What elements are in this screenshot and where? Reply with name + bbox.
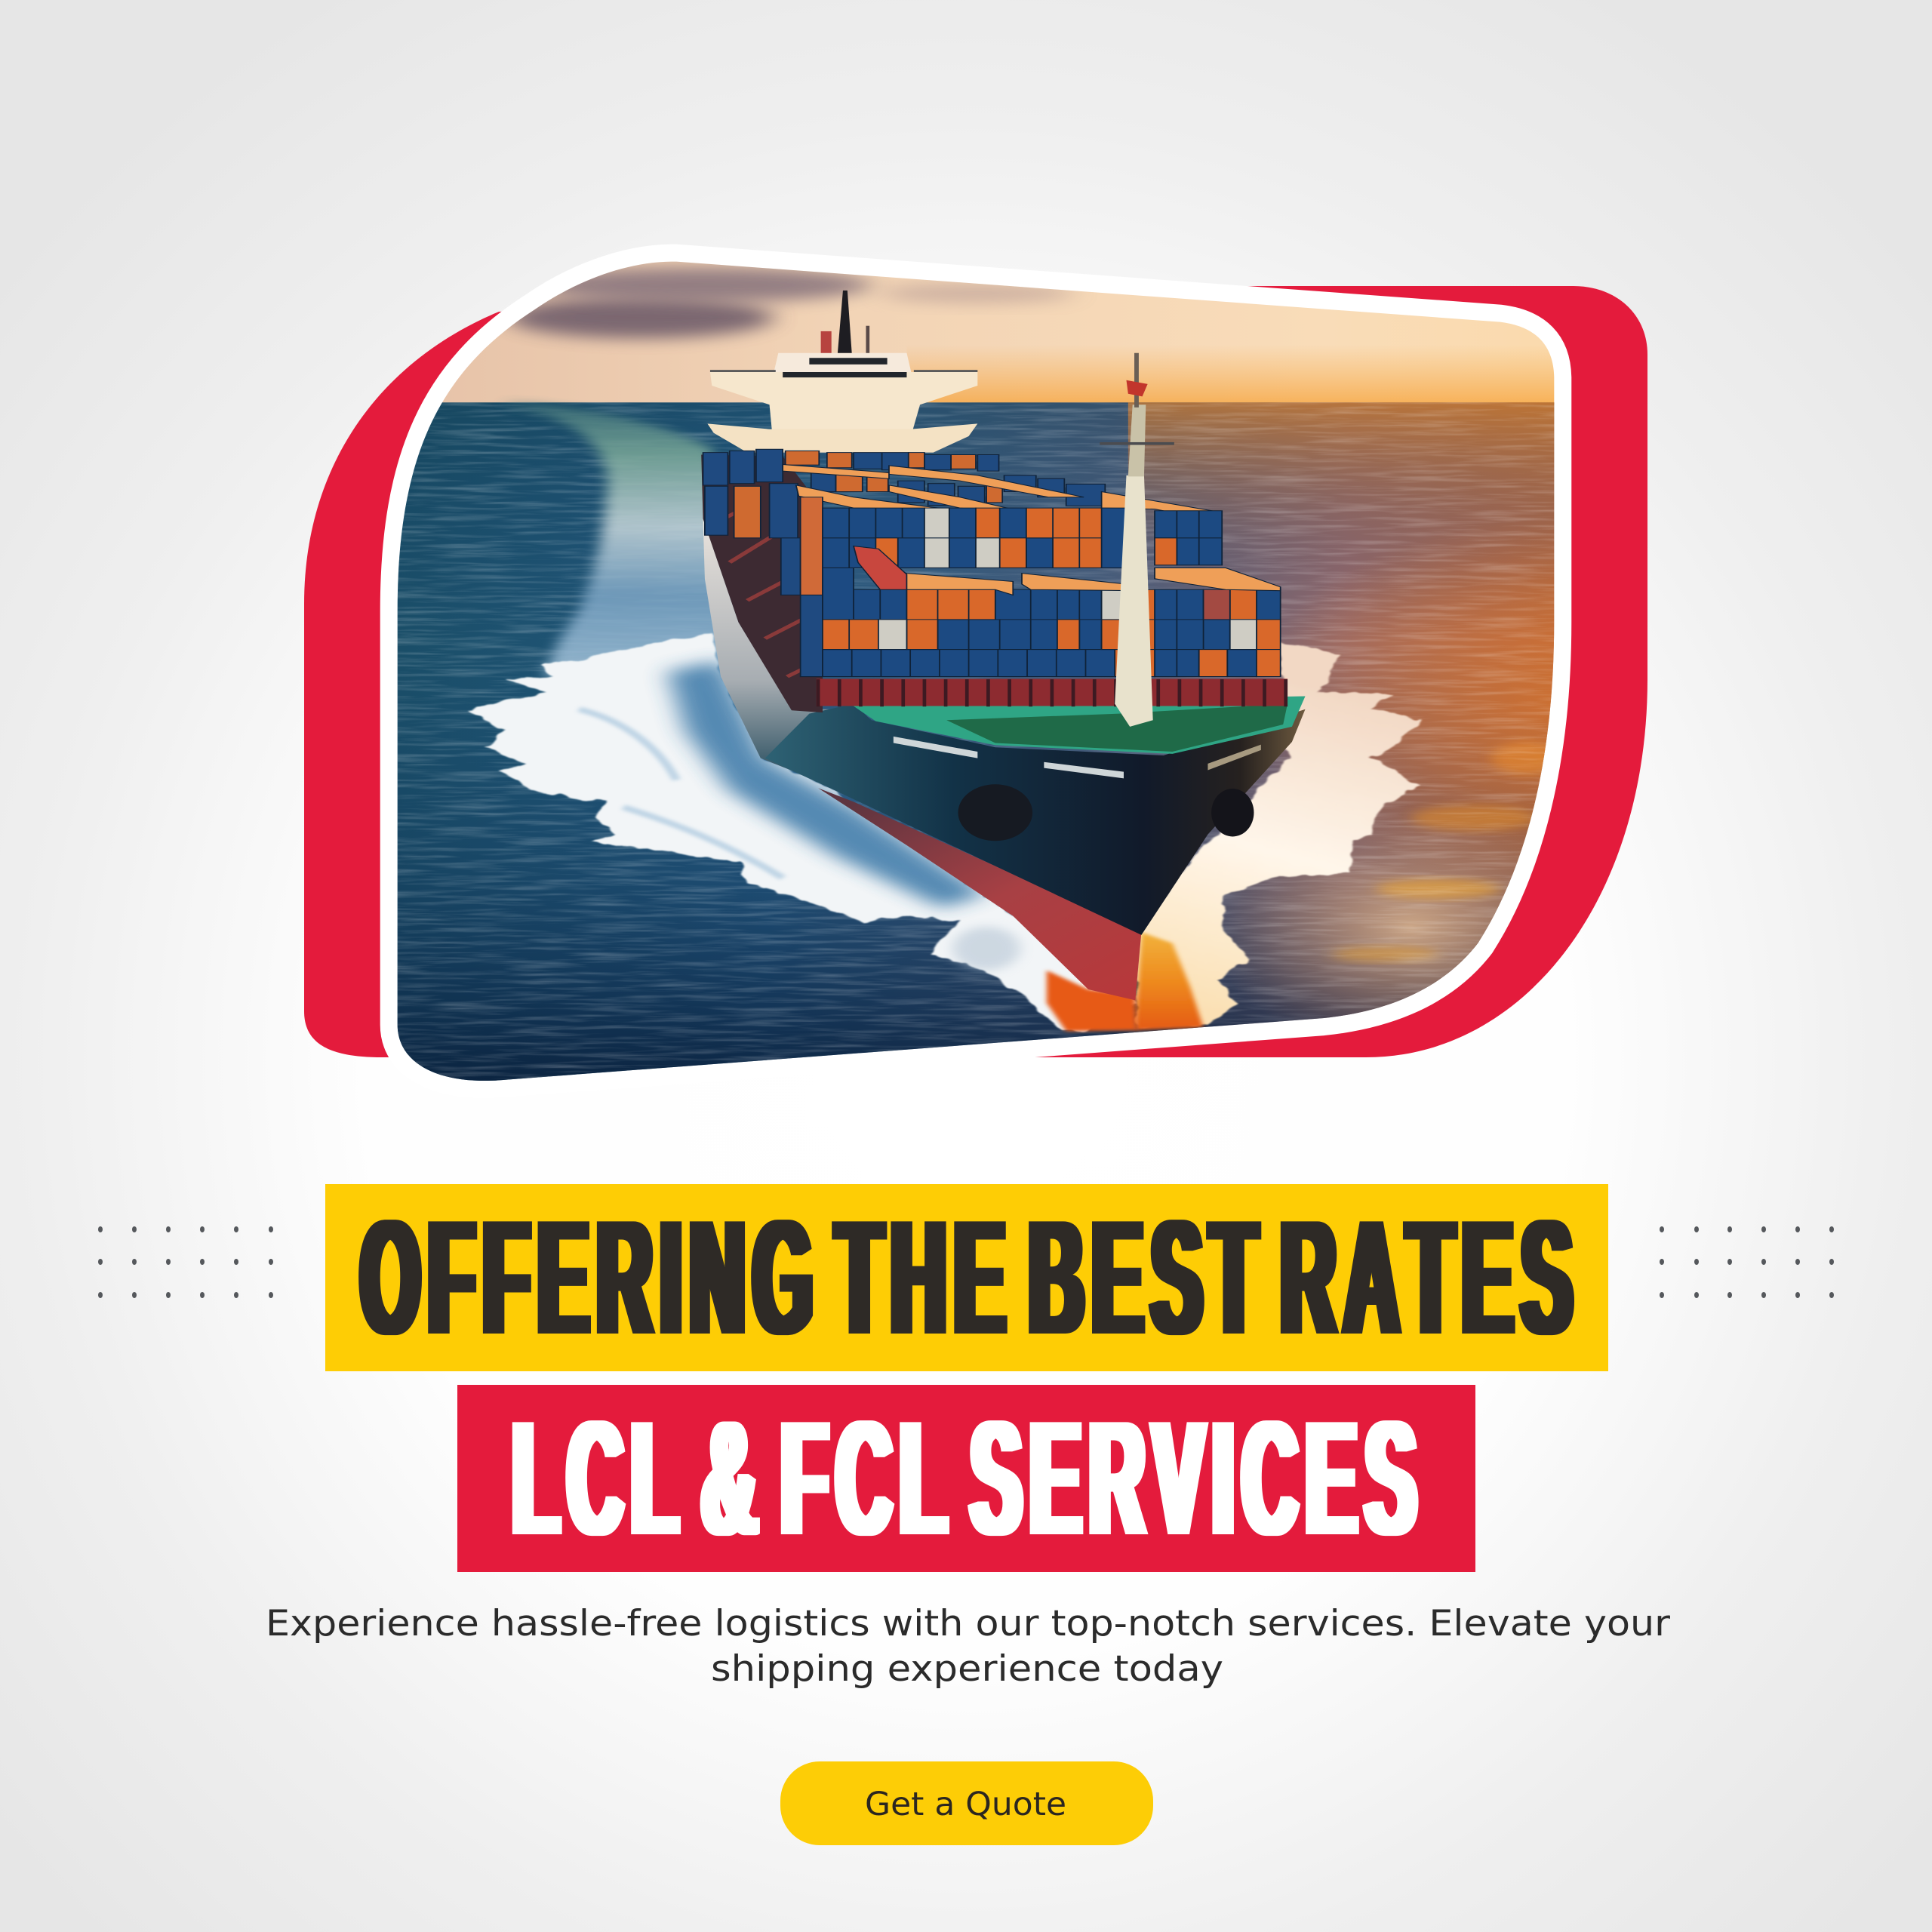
hull: red lower: [818, 788, 1141, 1000]
description text: [266, 1603, 1671, 1690]
bow wave fire-orange reflection: [1047, 932, 1204, 1031]
hull markings and anchors: [894, 737, 1261, 841]
containers: front stacks: [801, 497, 1281, 677]
containers: rear stacks: [703, 449, 1221, 677]
red lashing rail: [817, 678, 1287, 706]
white photo border: [398, 262, 1554, 1081]
red backing shape: [304, 286, 1647, 1057]
decorative dot grid left: [98, 1226, 273, 1298]
rear rigging: [701, 455, 823, 712]
yellow headline banner: [325, 1184, 1608, 1371]
decorative dot grid right: [1660, 1226, 1834, 1298]
photo: container ship at sunset: [375, 252, 1580, 1088]
headline: lcl and fcl services: LCL & FCL SERVICES: [512, 1386, 1425, 1569]
foremast: [1100, 353, 1174, 727]
bridge superstructure: [707, 291, 977, 453]
ship wake: [500, 404, 747, 688]
headline: offering the best rates: OFFERING THE BEST RATES: [361, 1186, 1580, 1368]
get a quote button: [780, 1761, 1153, 1845]
hull: black bow: [765, 704, 1306, 935]
description text: shipping experience today: [711, 1648, 1223, 1690]
red headline banner: [457, 1385, 1475, 1572]
sky: [441, 261, 1555, 405]
description text: Experience hassle-free logistics with our top-notch services. Elevate your: [266, 1603, 1671, 1644]
button label: Get a Quote: [865, 1786, 1066, 1823]
sea: [375, 402, 1580, 1088]
hull: side: [703, 519, 830, 771]
green foredeck: [852, 697, 1306, 754]
foam: starboard side: [1137, 641, 1422, 1027]
foam: port side: [469, 633, 1137, 1030]
